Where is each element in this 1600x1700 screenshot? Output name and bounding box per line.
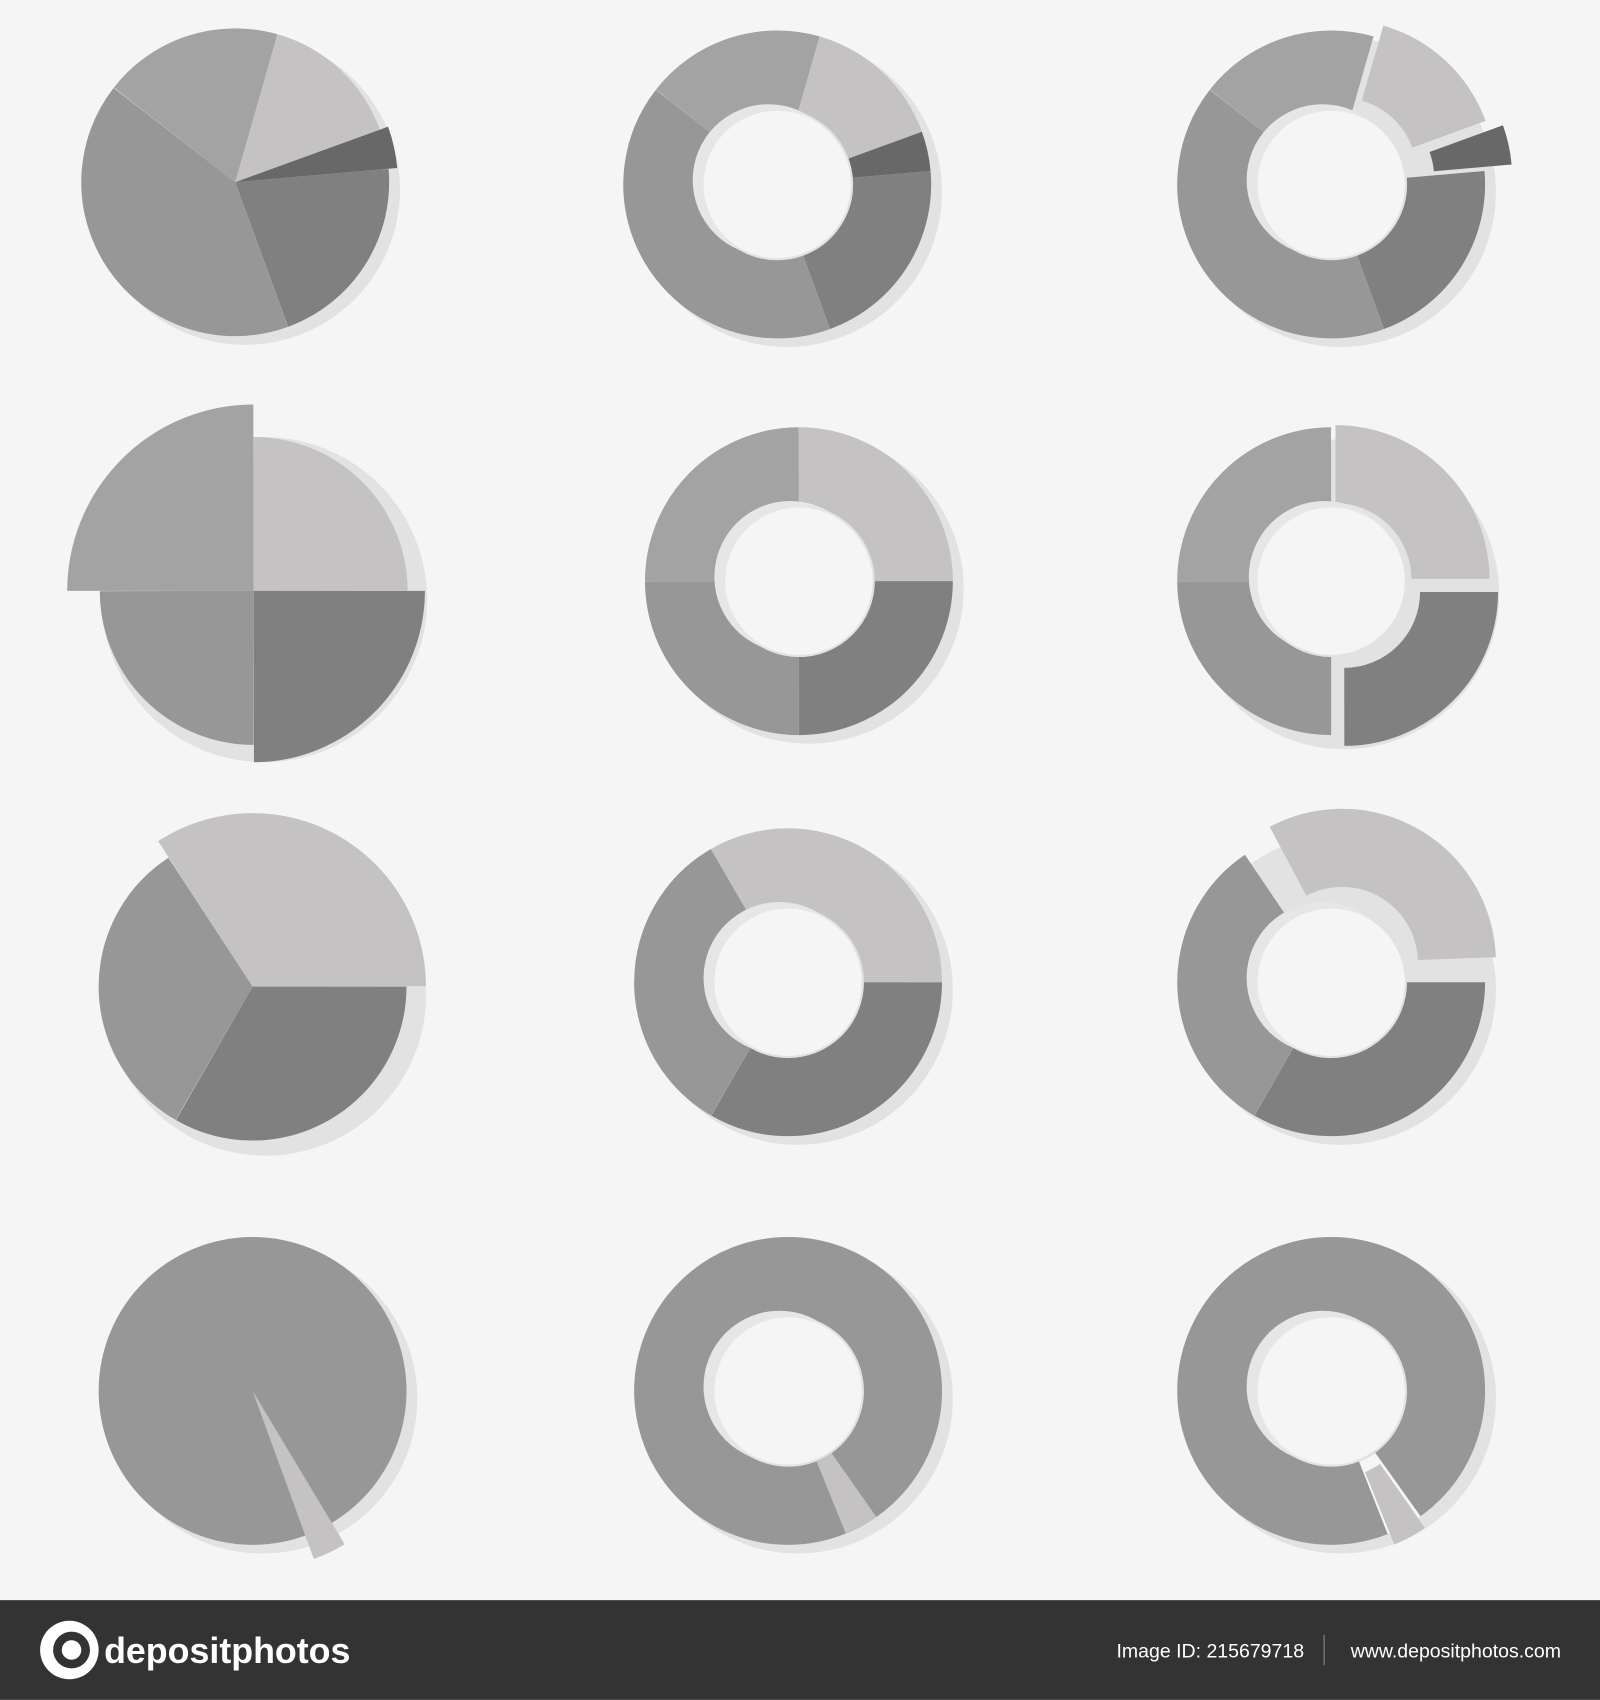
chart 1: pie with five slices — [90, 35, 400, 345]
footer brand text: depositphotos — [104, 1631, 350, 1671]
footer bar — [0, 1600, 1600, 1700]
footer url: www.depositphotos.com — [1350, 1641, 1561, 1663]
chart 8: donut with three segments — [631, 825, 953, 1145]
chart 12: exploded donut with thin sliver — [1171, 1231, 1497, 1562]
chart 11: donut with thin sliver — [628, 1231, 953, 1554]
chart 9: exploded donut with three segments — [1174, 807, 1497, 1145]
chart 10: pie with thin sliver — [99, 1237, 417, 1554]
chart 7: pie with three slices — [105, 835, 426, 1156]
chart 6: exploded donut with four quarters — [1189, 439, 1499, 749]
chart 4: pie with four quarters — [102, 437, 427, 762]
icon: logo — [40, 1621, 99, 1679]
footer image id: Image ID: 215679718 — [1117, 1641, 1304, 1663]
chart 5: donut with four quarters — [654, 434, 964, 744]
chart 3: exploded donut with five segments — [1170, 23, 1506, 347]
chart 2: donut with five segments — [616, 23, 942, 347]
